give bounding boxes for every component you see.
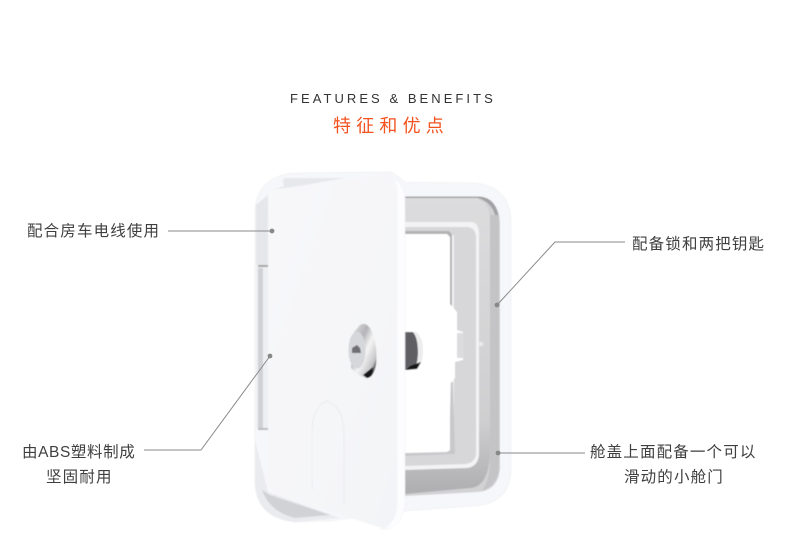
label: wiring compatibility: 配合房车电线使用: [27, 223, 160, 240]
heading: chinese title: 特征和优点: [333, 116, 449, 136]
leader line: bottom right: [496, 451, 585, 455]
label: abs material: 由ABS塑料制成: [22, 444, 135, 461]
lock latch behind door: [405, 332, 423, 370]
lock cylinder: [348, 324, 376, 378]
inner lip: [405, 222, 479, 470]
leader line: top right: [495, 242, 625, 307]
label: lock and keys: 配备锁和两把钥匙: [632, 236, 765, 253]
label: sliding door line 2: 滑动的小舱门: [624, 469, 724, 486]
label: sliding door line 1: 舱盖上面配备一个可以: [590, 444, 757, 461]
recess of the frame: [405, 196, 500, 496]
leader line: bottom left: [144, 354, 272, 450]
opening: [405, 234, 463, 453]
outer frame: [255, 172, 511, 522]
leader line: top left: [168, 229, 274, 233]
heading: english title: FEATURES & BENEFITS: [290, 91, 496, 106]
left hinge strip: [256, 266, 268, 428]
label: durable: 坚固耐用: [46, 469, 113, 486]
door panel: [268, 175, 405, 529]
